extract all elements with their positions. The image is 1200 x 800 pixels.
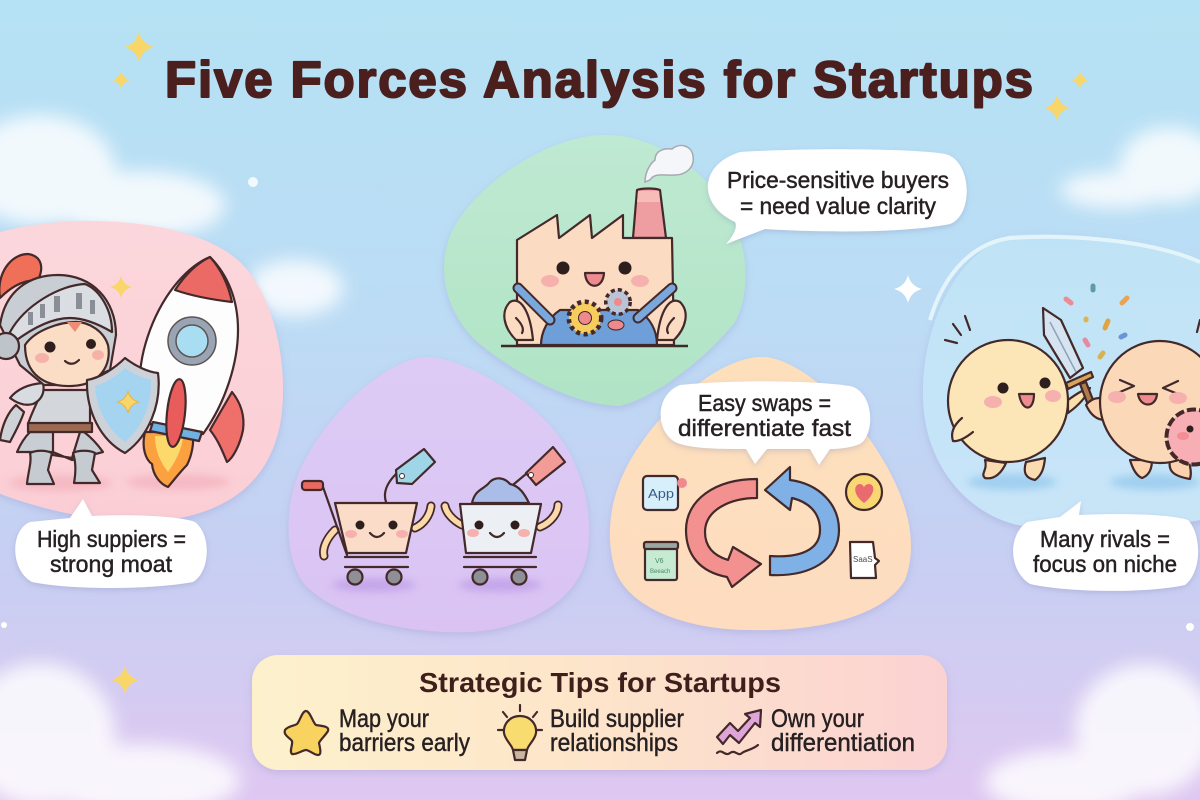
tip: map your barriers early: Map your [339,705,429,733]
tip: build supplier relationships: relationships [550,729,678,757]
callout: price-sensitive buyers [708,149,967,244]
icon: SaaS note: SaaS [853,555,873,564]
tip: map your barriers early: barriers early [339,729,470,757]
icon: blue cycle arrow [765,467,839,575]
title: Five Forces Analysis for Startups [165,51,1033,108]
callout: easy swaps: Easy swaps = [698,390,831,416]
callout: high suppliers: High suppiers = [37,526,186,552]
icon: right rival character [1086,320,1200,479]
callout: many rivals: focus on niche [1033,551,1177,577]
icon: growth arrow [717,710,761,754]
tip: own your differentiation [771,705,915,757]
icon: SaaS note [850,542,879,578]
callout: many rivals [1013,501,1198,591]
tip: map your barriers early [339,705,470,757]
icon: light bulb [498,705,542,760]
callout: easy swaps: differentiate fast [678,415,852,441]
icon: green jar: V6 [655,558,664,565]
icon: ground shadows [8,474,230,491]
panel: pink knight and rocket force [0,221,283,588]
panel: green factory force [444,135,967,406]
tip: build supplier relationships [550,705,684,757]
panel: orange substitutes force [610,357,911,630]
callout: easy swaps [661,381,870,465]
icon: factory character [501,145,693,346]
panel: blue rivals force [923,234,1200,591]
icon: app tile: App [648,486,674,501]
icon: sword [1043,308,1093,405]
heading: strategic tips: Strategic Tips for Startups [419,667,781,698]
icon: heart bubble [846,474,882,510]
icon: pink fluffy character [1167,410,1200,464]
icon: left shopping cart [302,449,435,584]
icon: left rival character with sword [945,316,1090,480]
callout: price-sensitive buyers: = need value clarity [740,193,936,219]
callout: high suppliers [15,499,207,588]
icon: rocket [140,257,243,487]
tip: own your differentiation: Own your [771,705,864,733]
callout: many rivals: Many rivals = [1040,526,1170,552]
icon: cart shadows [332,578,542,592]
panel: strategic tips [252,655,947,770]
icon: green jar [644,542,678,580]
tip: build supplier relationships: Build supplier [550,705,684,733]
panel: purple shopping carts force [289,357,589,632]
icon: star [285,711,328,755]
callout: high suppliers: strong moat [50,551,173,577]
tip: own your differentiation: differentiation [771,729,915,757]
icon: character shadows [967,474,1200,490]
icon: app tile [643,476,687,510]
icon: green jar: Beeach [650,569,670,575]
icon: knight [0,254,159,484]
icon: right shopping cart [445,447,565,584]
icon: confetti [1066,286,1127,357]
callout: price-sensitive buyers: Price-sensitive buyers [727,167,949,193]
icon: red cycle arrow [686,479,761,587]
